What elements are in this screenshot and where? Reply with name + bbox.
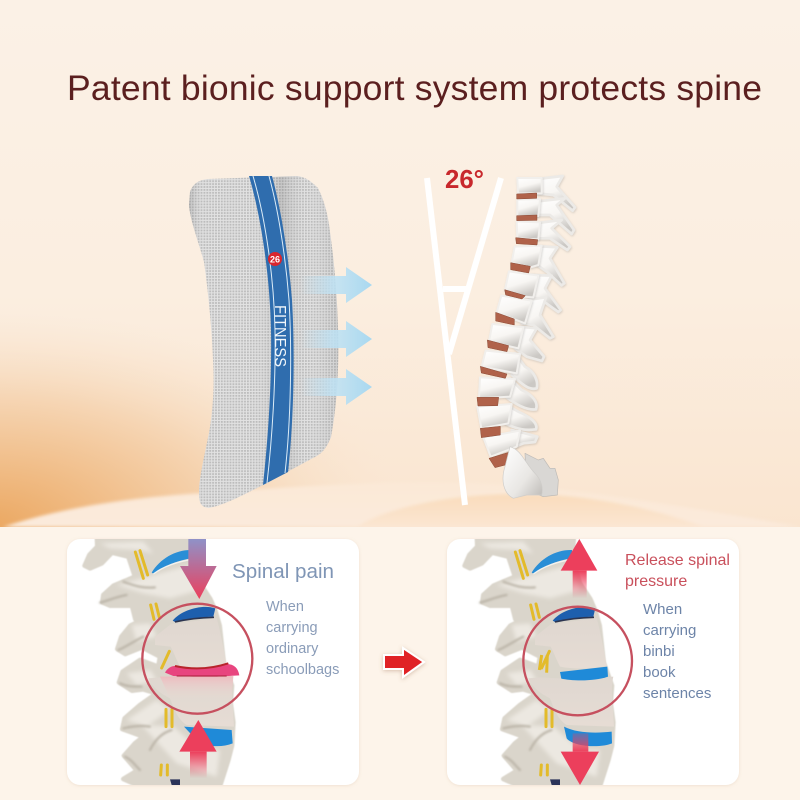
- support arrows: [300, 267, 372, 405]
- text: when carrying ordinary schoolbags: ordinary: [266, 641, 319, 657]
- panel: release spinal pressure: [447, 539, 739, 785]
- text: when carrying ordinary schoolbags: When: [266, 599, 304, 615]
- highlight circle: [523, 607, 632, 715]
- heading: release spinal pressure: Release spinal: [625, 552, 730, 569]
- release arrow up: [561, 539, 597, 598]
- healthy disc: [560, 667, 608, 680]
- intervertebral discs: [477, 193, 538, 468]
- angle lines: [427, 178, 501, 505]
- compressed disc: [165, 664, 239, 677]
- text: when carrying binbi book sentences: binbi: [643, 643, 675, 660]
- strap stitching: [253, 176, 291, 483]
- compression arrow bottom: [179, 720, 217, 778]
- arrow between panels: [384, 648, 424, 677]
- text: when carrying binbi book sentences: carrying: [643, 622, 696, 639]
- sacrum: [503, 447, 558, 498]
- highlight circle: [142, 604, 252, 714]
- spine close-up: [85, 539, 234, 785]
- lumbar cushion: [189, 176, 338, 508]
- angle label: 26°: [445, 164, 484, 194]
- brand logo: 26: [270, 254, 280, 264]
- title: Patent bionic support system protects spine: [67, 68, 762, 108]
- lower blue disc: [184, 727, 233, 746]
- panel: spinal pain: [67, 539, 359, 785]
- blue strap: [249, 176, 294, 485]
- nerve in gap: [539, 655, 547, 673]
- text: when carrying ordinary schoolbags: schoolbags: [266, 662, 339, 678]
- spine close-up: [465, 539, 614, 785]
- brand logo: [268, 252, 282, 266]
- text: when carrying binbi book sentences: When: [643, 601, 682, 618]
- heading: release spinal pressure: pressure: [625, 573, 687, 590]
- spine illustration: [477, 176, 575, 498]
- spinal processes: [505, 176, 575, 447]
- heading: spinal pain: Spinal pain: [232, 561, 334, 583]
- release arrow down: [561, 733, 599, 785]
- vertebral bodies: [477, 178, 542, 457]
- text: when carrying binbi book sentences: book: [643, 664, 676, 681]
- lower vertebra inflammation: [160, 676, 234, 688]
- text: when carrying binbi book sentences: sentences: [643, 685, 711, 702]
- lower blue disc: [564, 727, 612, 746]
- text: when carrying ordinary schoolbags: carrying: [266, 620, 318, 636]
- compression arrow top: [180, 539, 217, 599]
- background: [0, 195, 800, 527]
- strap label: FITNESS: [271, 305, 288, 367]
